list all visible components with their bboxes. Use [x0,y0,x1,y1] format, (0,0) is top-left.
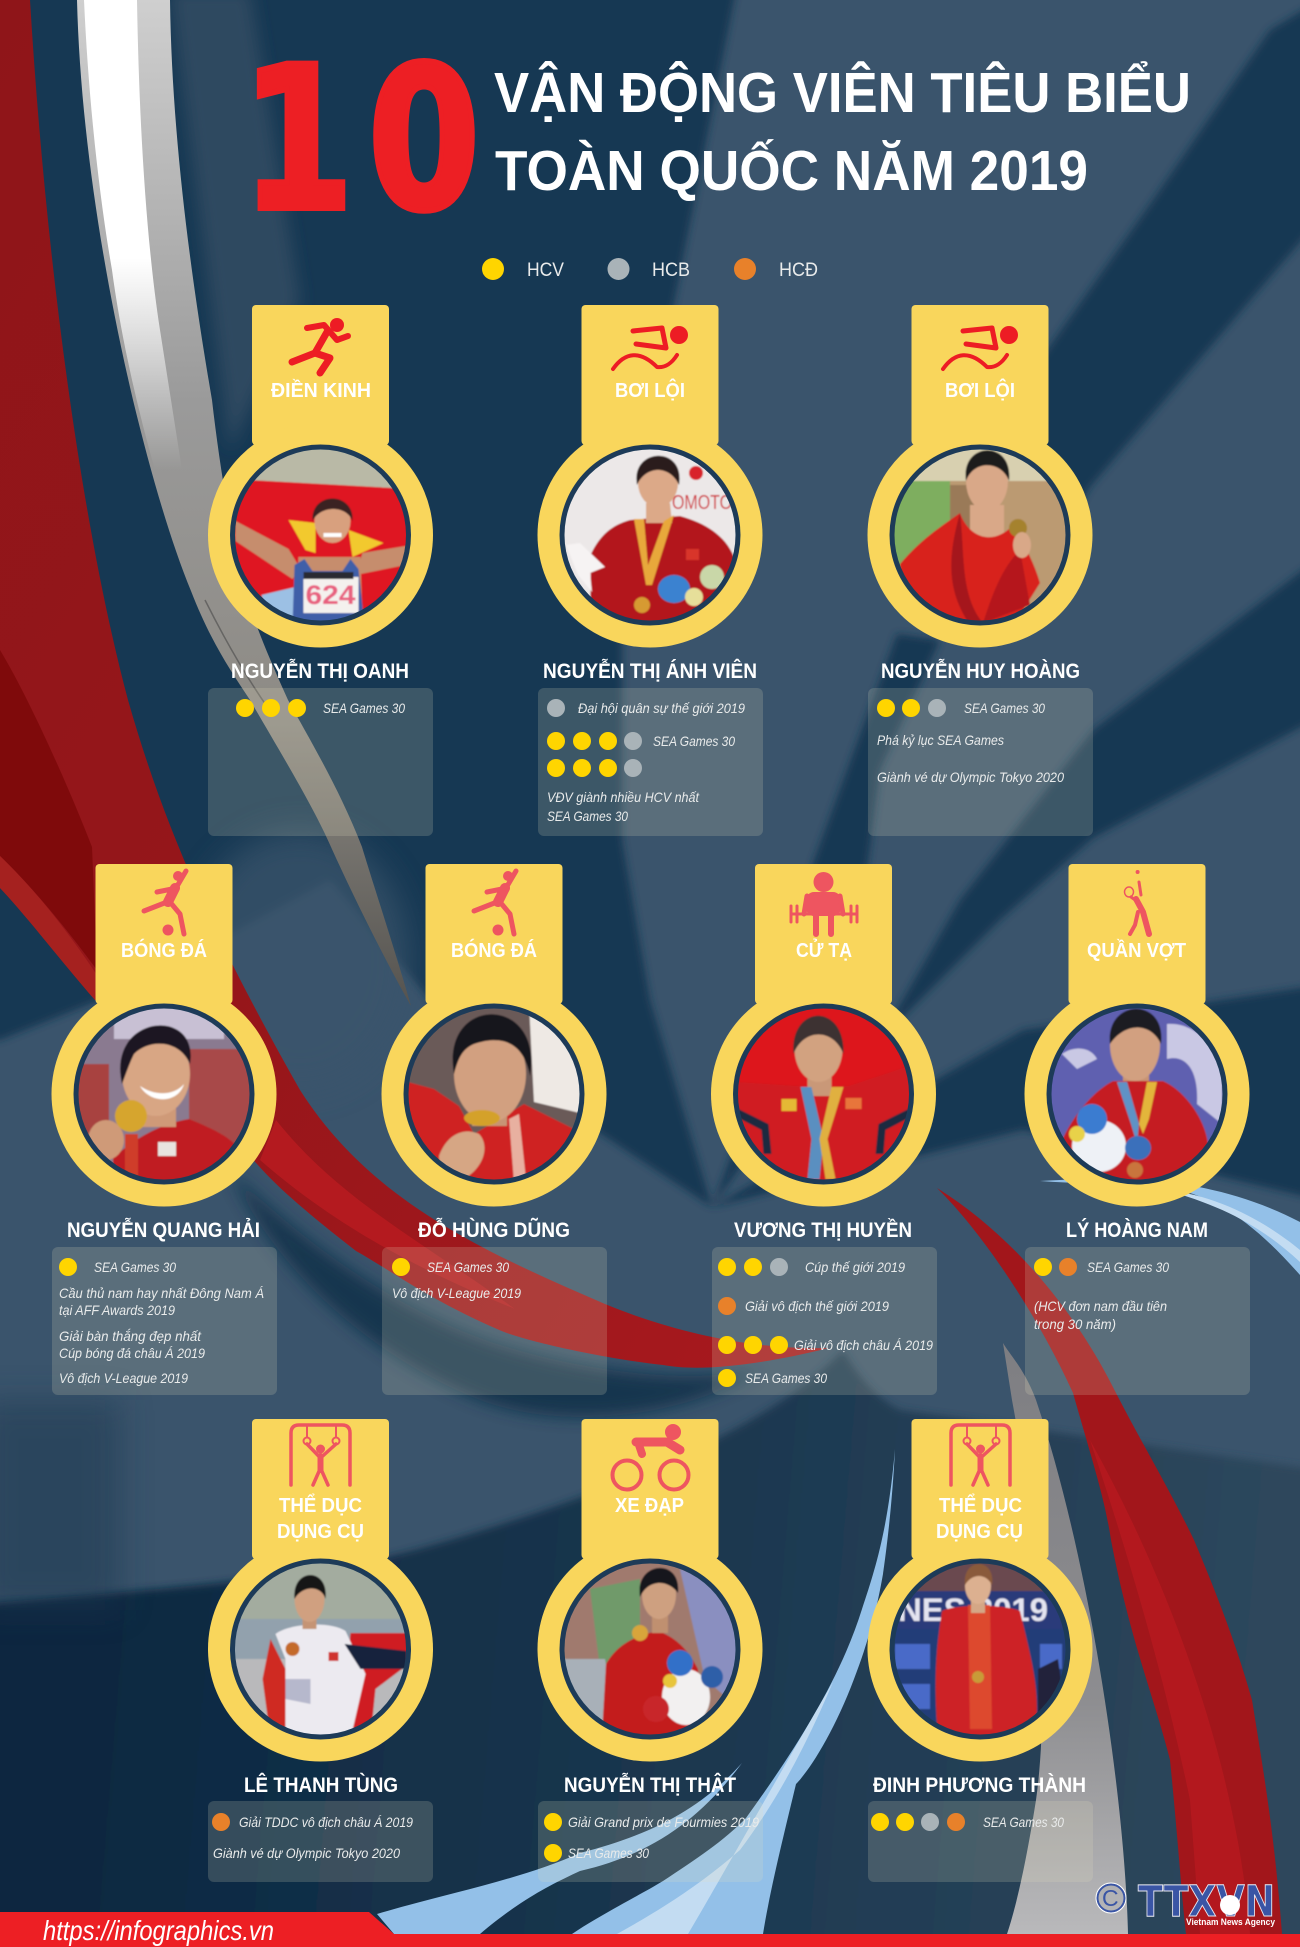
athlete card: Đinh Phương Thành [868,1419,1093,1882]
footer bar with website url: https://infographics.vn [43,1915,274,1946]
panel: achievements [868,688,1093,836]
panel: achievements: Phá kỷ lục SEA Games [877,732,1004,748]
panel: achievements: Cầu thủ nam hay nhất Đông Nam Á [59,1285,264,1301]
sport label [936,1494,1023,1543]
panel: achievements: Giải vô địch thế giới 2019 [745,1298,889,1314]
name: NGUYỄN QUANG HẢI [67,1219,260,1242]
sport label: BƠI LỘI [945,378,1015,402]
panel: achievements: Giải vô địch châu Á 2019 [794,1337,933,1353]
logo: TTXVN: Vietnam News Agency [1186,1917,1276,1928]
sport label: THỂ DỤC [939,1494,1022,1517]
panel: achievements: VĐV giành nhiều HCV nhất [547,789,700,805]
legend: HCB [652,260,690,281]
panel: achievements: SEA Games 30 [427,1259,509,1275]
panel: achievements [538,688,763,836]
sport label [277,1494,364,1543]
swoosh: left red ribbon [0,0,829,1368]
panel: achievements: Giải TDDC vô địch châu Á 2019 [239,1814,413,1830]
photo [734,1004,914,1184]
title line 1: VẬN ĐỘNG VIÊN TIÊU BIỂU [494,60,1191,125]
title number 10: 1 [241,24,354,255]
photo [74,1004,254,1184]
medal frame [52,864,276,1206]
sport label: CỬ TẠ [796,938,852,962]
icon: swimmer [943,326,1018,369]
medal frame [868,1419,1092,1762]
swoosh: light blue ribbons [377,1179,1300,1934]
sport label: ĐIỀN KINH [271,379,371,402]
panel: achievements [1025,1247,1250,1395]
icon: gymnast on rings [951,1425,1010,1485]
athlete card: Nguyễn Thị Ánh Viên [538,305,763,836]
name: LÊ THANH TÙNG [244,1773,398,1797]
panel: achievements [538,1801,763,1882]
athlete card: Nguyễn Thị Thật [538,1419,763,1882]
swoosh: right gray ribbon [1003,1343,1128,1934]
panel: achievements: trong 30 năm) [1034,1316,1116,1332]
panel: achievements: Cúp thế giới 2019 [805,1259,905,1275]
name: NGUYỄN THỊ ÁNH VIÊN [543,659,757,683]
panel: achievements: Vô địch V-League 2019 [392,1285,521,1301]
medal frame [538,1419,762,1762]
name: NGUYỄN HUY HOÀNG [881,660,1080,683]
panel: achievements: Giành vé dự Olympic Tokyo 2020 [213,1845,400,1861]
sport label: QUẦN VỢT [1087,939,1186,962]
panel: achievements: SEA Games 30 [745,1370,827,1386]
photo [560,1559,740,1739]
photo [1047,1004,1227,1184]
medal frame [711,864,936,1206]
athlete card: Lê Thanh Tùng [208,1419,433,1882]
swoosh: right red ribbon [937,1188,1282,1934]
title line 2: TOÀN QUỐC NĂM 2019 [495,138,1088,203]
sport label: BÓNG ĐÁ [121,938,207,962]
footer bar with website url [0,1912,1300,1947]
medal frame [208,1419,433,1762]
medal frame [868,305,1092,648]
icon: swimmer [613,326,688,369]
sport label: THỂ DỤC [279,1494,362,1517]
legend: HCV [527,260,564,281]
photo [560,445,740,625]
logo: TTXVN: TTXVN [1138,1877,1275,1927]
name: ĐỖ HÙNG DŨNG [418,1218,570,1242]
panel: achievements: Cúp bóng đá châu Á 2019 [59,1345,205,1361]
panel: achievements: SEA Games 30 [94,1259,176,1275]
panel: achievements [208,1801,433,1882]
photo [230,1559,410,1739]
icon: tennis player [1124,870,1149,934]
name: NGUYỄN THỊ THẬT [564,1773,736,1797]
medal frame [538,305,762,648]
athlete card: Vương Thị Huyền [711,864,937,1395]
panel: achievements [208,688,433,836]
title number 10: 0 [368,24,480,255]
icon: footballer [144,871,186,936]
panel: achievements: SEA Games 30 [964,700,1045,716]
panel: achievements: SEA Games 30 [653,733,735,749]
photo [230,445,410,625]
photo: OMOTO [672,492,732,514]
name: LÝ HOÀNG NAM [1066,1218,1208,1242]
medal frame [1024,864,1250,1206]
icon: gymnast on rings [291,1425,350,1485]
panel: achievements: SEA Games 30 [568,1845,649,1861]
panel: achievements: Vô địch V-League 2019 [59,1370,188,1386]
medal frame [382,864,606,1206]
panel: achievements: Giành vé dự Olympic Tokyo 2020 [877,769,1064,785]
photo: 624 [306,580,356,610]
athlete card: Đỗ Hùng Dũng [382,864,607,1395]
icon: cyclist [612,1424,688,1490]
name: ĐINH PHƯƠNG THÀNH [873,1774,1086,1797]
panel: achievements [382,1247,607,1395]
legend: HCĐ [779,260,818,281]
swoosh: silver ribbon [77,0,411,1006]
panel: achievements: Đại hội quân sự thế giới 2019 [578,700,745,716]
panel: achievements: (HCV đơn nam đầu tiên [1034,1298,1167,1314]
panel: achievements: SEA Games 30 [1087,1259,1169,1275]
icon: runner [292,318,348,373]
photo [890,445,1070,625]
sport label: BƠI LỘI [615,378,685,402]
panel: achievements: SEA Games 30 [547,808,628,824]
sport label: DỤNG CỤ [277,1521,364,1543]
legend [482,258,818,281]
photo [890,1559,1070,1739]
panel: achievements: Giải bàn thắng đẹp nhất [59,1328,202,1344]
sport label: XE ĐẠP [615,1495,684,1517]
name: VƯƠNG THỊ HUYỀN [734,1219,912,1242]
panel: achievements: tại AFF Awards 2019 [59,1302,175,1318]
sport label: DỤNG CỤ [936,1521,1023,1543]
sport label: BÓNG ĐÁ [451,938,537,962]
panel: achievements: SEA Games 30 [323,700,405,716]
medal frame [208,305,433,648]
photo [404,1004,584,1184]
title number 10 [241,24,480,255]
athlete card: Nguyễn Quang Hải [52,864,277,1395]
panel: achievements: SEA Games 30 [983,1814,1064,1830]
name: NGUYỄN THỊ OANH [231,660,409,683]
panel: achievements [868,1801,1093,1882]
panel: achievements [52,1247,277,1395]
athlete card: Nguyễn Huy Hoàng [868,305,1093,836]
athlete card: Nguyễn Thị Oanh [208,305,433,836]
panel: achievements [712,1247,937,1395]
title [241,24,1191,255]
photo: NES 2019 [898,1592,1048,1628]
icon: weightlifter [791,872,857,934]
logo: TTXVN [1096,1877,1276,1928]
icon: footballer [474,871,516,936]
logo: TTXVN: C [1102,1885,1119,1911]
athlete card: Lý Hoàng Nam [1024,864,1250,1395]
panel: achievements: Giải Grand prix de Fourmies 2019 [568,1814,759,1830]
